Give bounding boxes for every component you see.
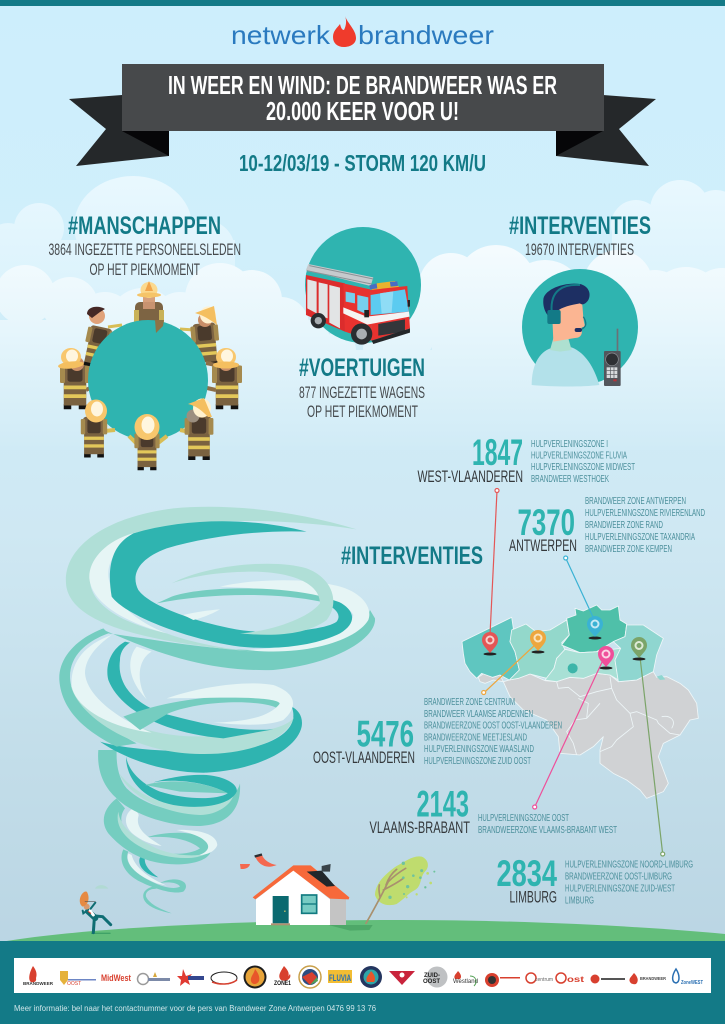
heading: interventies map: #INTERVENTIES: [341, 542, 483, 570]
tornado: [59, 507, 375, 913]
green hill: [0, 920, 725, 945]
logo: red star: [177, 969, 204, 986]
block: vlaams-brabant: [370, 784, 617, 837]
block: antwerpen: 7370: [518, 502, 575, 543]
voertuigen heading: [299, 354, 425, 421]
block: oost-vlaanderen: BRANDWEER ZONE CENTRUM: [424, 697, 515, 708]
icon: man with umbrella: [80, 885, 111, 933]
block: oost-vlaanderen: [313, 697, 562, 767]
date and storm subtitle: 10-12/03/19 - STORM 120 KM/U: [239, 150, 486, 176]
block: west-vlaanderen: HULPVERLENINGSZONE FLUVIA: [531, 450, 627, 462]
icon: tree bending in wind: [366, 856, 435, 923]
block: oost-vlaanderen: OOST-VLAANDEREN: [313, 748, 415, 767]
logo: circular crest: [299, 966, 321, 988]
logo: brandweer flame: BRANDWEER: [640, 976, 667, 981]
logo: rivierenland: [138, 972, 170, 984]
logo: netwerk brandweer: brandweer: [358, 20, 494, 50]
block: antwerpen: BRANDWEER ZONE KEMPEN: [585, 544, 672, 555]
block: west-vlaanderen: BRANDWEER WESTHOEK: [531, 474, 609, 485]
panel: manschappen heading: 3864 INGEZETTE PERSONEELSLEDEN: [48, 240, 241, 259]
block: oost-vlaanderen: HULPVERLENINGSZONE ZUID OOST: [424, 756, 531, 767]
logo: centrum: [526, 973, 553, 983]
wallonia grey: [503, 672, 698, 798]
block: west-vlaanderen: WEST-VLAANDEREN: [418, 467, 523, 486]
firefighter bottom: [129, 414, 167, 470]
logo: westland: [453, 971, 478, 986]
block: vlaams-brabant: BRANDWEERZONE VLAAMS-BRABANT WEST: [478, 825, 617, 836]
pin oost-vlaanderen: [530, 630, 546, 654]
clouds: [0, 176, 725, 450]
block: west-vlaanderen: HULPVERLENINGSZONE I: [531, 439, 608, 450]
logo: oval: [211, 972, 237, 984]
logo: zuiderkempen oost: OOST: [67, 981, 81, 987]
tornado lower coils: [98, 750, 240, 913]
panel: voertuigen: [299, 227, 425, 421]
firefighter top: [134, 281, 164, 332]
icon: fire truck: [306, 264, 410, 345]
panel: manschappen heading: [48, 212, 241, 279]
logo: zuid-oost: [423, 966, 448, 988]
west-vlaanderen: [462, 617, 519, 680]
logo: fluvia: FLUVIA: [329, 973, 351, 983]
block: oost-vlaanderen: BRANDWEERZONE OOST OOST-VLAANDEREN: [424, 720, 562, 732]
logo: netwerk brandweer: netwerk: [231, 20, 331, 50]
antwerpen: [562, 605, 627, 653]
limburg: [613, 625, 663, 682]
logo: zone1: [274, 966, 292, 987]
block: oost-vlaanderen: 5476: [356, 714, 414, 754]
logo: oost: [556, 973, 584, 984]
small grey piece at coast: [478, 673, 503, 683]
teal circle behind operator: [522, 269, 638, 385]
pin west-vlaanderen: [482, 632, 498, 656]
firefighter top right: [180, 306, 221, 367]
firefighters around circle: [58, 281, 242, 470]
brussels: [568, 663, 578, 673]
block: limburg: LIMBURG: [510, 888, 557, 906]
logo: zuid-west limburg: [590, 974, 625, 984]
logo: west drop: [673, 969, 703, 986]
voertuigen heading: 877 INGEZETTE WAGENS: [299, 383, 425, 402]
block: oost-vlaanderen: BRANDWEERZONE MEETJESLAND: [424, 732, 527, 744]
block: limburg: 2834: [496, 853, 557, 894]
logo: navy circle: [360, 966, 382, 988]
logo: zone1: ZONE1: [274, 981, 292, 987]
sleeve over circle: [155, 320, 164, 333]
title banner: 20.000 KEER VOOR U!: [266, 96, 459, 126]
voertuigen heading: #VOERTUIGEN: [299, 354, 425, 382]
pin limburg: [631, 637, 647, 660]
panel: interventies top: #INTERVENTIES: [509, 212, 651, 240]
firefighter right: [206, 348, 242, 409]
voeren enclave: [657, 675, 665, 680]
firefighter left: [58, 348, 90, 409]
firefighter top left: [80, 307, 122, 370]
logo: red circle zone: [485, 973, 520, 987]
block: antwerpen: ANTWERPEN: [509, 536, 577, 555]
oost-vlaanderen: [509, 620, 569, 680]
top bar: [0, 0, 725, 6]
pin antwerpen: [587, 616, 603, 640]
logo: brandweer flame: [629, 973, 667, 984]
logo: netwerk brandweer: [231, 16, 494, 50]
block: oost-vlaanderen: HULPVERLENINGSZONE WAASLAND: [424, 744, 534, 755]
map of Belgium: [462, 605, 698, 798]
icon: operator with headset and radio: [532, 284, 621, 386]
logo: zuid-oost: OOST: [423, 979, 440, 985]
logo strip: [14, 958, 711, 993]
block: west-vlaanderen: 1847: [472, 432, 523, 473]
pin vlaams-brabant: [598, 646, 614, 670]
logo: centrum: centrum: [535, 977, 553, 983]
panel: interventies top: 19670 INTERVENTIES: [525, 240, 634, 259]
logo: west drop: ZoneWEST: [681, 980, 703, 986]
block: vlaams-brabant: 2143: [416, 784, 469, 824]
teal circle: [88, 320, 208, 440]
logo: zuid-oost: ZUID-: [424, 973, 440, 979]
title banner: IN WEER EN WIND: DE BRANDWEER WAS ER: [168, 70, 557, 100]
block: limburg: LIMBURG: [565, 896, 594, 906]
logo: brandweer: BRANDWEER: [23, 981, 54, 986]
panel: manschappen heading: #MANSCHAPPEN: [68, 212, 221, 240]
logo: zuiderkempen oost: [60, 971, 96, 987]
footer band: [0, 941, 725, 1024]
teal circle behind truck: [305, 227, 421, 343]
voertuigen heading: OP HET PIEKMOMENT: [307, 402, 418, 421]
logo: oost: ost: [567, 975, 584, 984]
block: antwerpen: [509, 496, 705, 555]
block: west-vlaanderen: HULPVERLENINGSZONE MIDWEST: [531, 462, 635, 473]
icon: house with flying roof tiles: [240, 853, 373, 931]
logo: black circle flame: [244, 966, 266, 988]
footer contact text: Meer informatie: bel naar het contactnummer voor de pers van Brandweer Zone Antwerpen 0476 99 13 76: [14, 1004, 377, 1013]
connector lines and end dots: [482, 488, 665, 856]
logo: fluvia: [328, 970, 352, 983]
block: vlaams-brabant: HULPVERLENINGSZONE OOST: [478, 813, 569, 824]
tornado upper and middle bands: [59, 507, 375, 773]
block: antwerpen: BRANDWEER ZONE RAND: [585, 520, 663, 531]
block: vlaams-brabant: VLAAMS-BRABANT: [370, 818, 470, 837]
panel: manschappen heading: OP HET PIEKMOMENT: [90, 260, 200, 279]
logo: brandweer: [23, 966, 54, 986]
internal borders: [557, 677, 680, 755]
firefighter lower right: [180, 398, 213, 460]
block: limburg: [496, 853, 693, 906]
title banner: [69, 64, 656, 166]
logo: red triangle: [389, 971, 415, 985]
map pins: [482, 616, 647, 670]
firefighter lower left: [81, 400, 115, 458]
block: west-vlaanderen: [418, 432, 635, 486]
block: oost-vlaanderen: BRANDWEER VLAAMSE ARDENNEN: [424, 709, 533, 720]
vlaams-brabant: [545, 648, 621, 682]
panel: interventies top: [509, 212, 651, 386]
logo: midwest: MidWest: [101, 973, 131, 983]
logo: westland: Westland: [453, 979, 478, 985]
